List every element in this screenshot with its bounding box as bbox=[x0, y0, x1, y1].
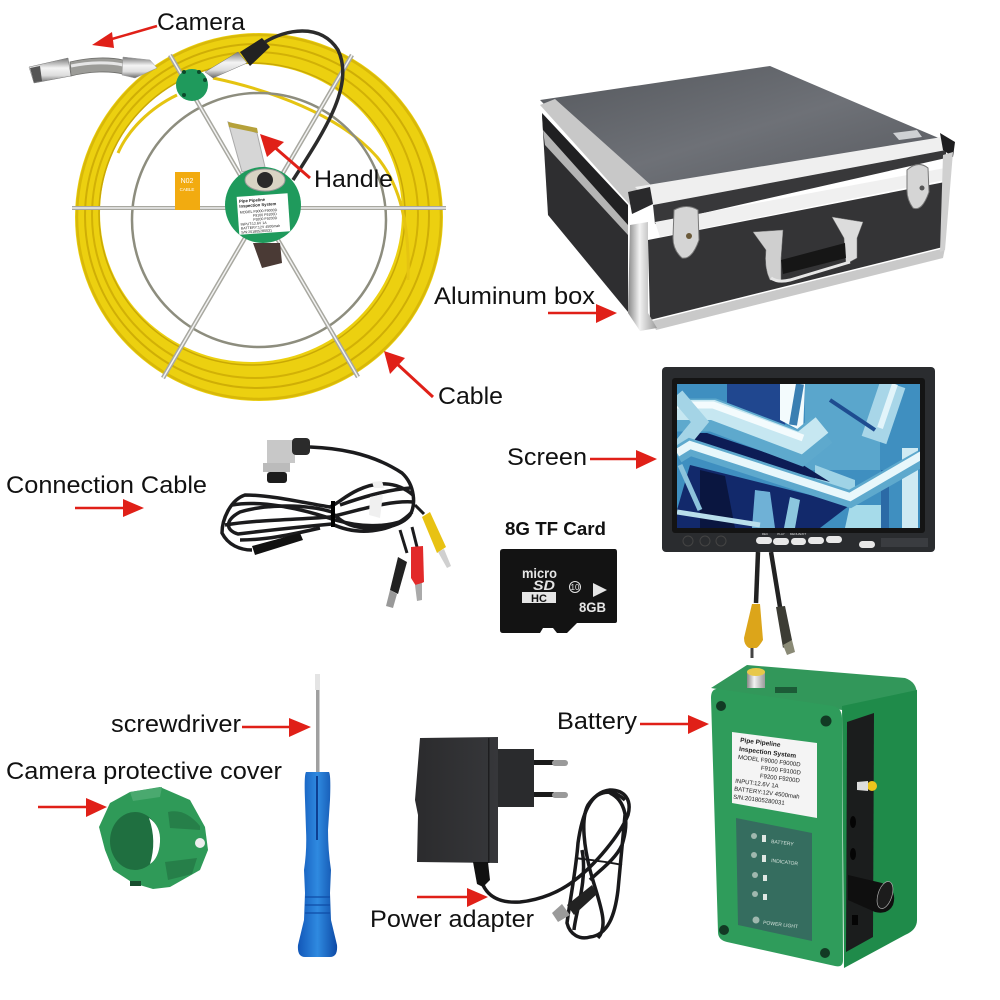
label: Connection Cable: Connection Cable bbox=[6, 472, 207, 499]
small green plate bbox=[176, 69, 208, 101]
8GB microSD card: 10 bbox=[571, 583, 580, 592]
pipe image bbox=[677, 384, 922, 528]
connector bbox=[263, 438, 310, 483]
lid left rail bbox=[540, 99, 652, 205]
label: Aluminum box: Aluminum box bbox=[434, 283, 595, 310]
length tag bbox=[175, 172, 200, 210]
8GB microSD card: HC bbox=[531, 593, 547, 605]
latch left bbox=[673, 206, 699, 258]
label: Battery: Battery bbox=[557, 708, 637, 735]
front face bbox=[711, 689, 843, 966]
hub with label: BATTERY:12V 4500mah bbox=[241, 224, 280, 231]
connection cable bbox=[222, 438, 451, 608]
label: 8G TF Card: 8G TF Card bbox=[505, 519, 606, 539]
bottom rail bbox=[652, 248, 945, 330]
front controls: MENU/EXIT bbox=[790, 532, 806, 536]
label: screwdriver: screwdriver bbox=[111, 711, 241, 738]
handle bbox=[228, 122, 282, 268]
label: Camera protective cover: Camera protective cover bbox=[6, 758, 282, 785]
length tag: CABLE bbox=[180, 187, 194, 192]
black side panel bbox=[846, 713, 896, 952]
camera protective cover bbox=[99, 787, 208, 889]
white tags bbox=[372, 481, 384, 488]
arrow: power adapter bbox=[417, 888, 488, 907]
aviation connector and black lead bbox=[205, 31, 343, 180]
8GB microSD card bbox=[500, 549, 617, 633]
arrow: protective cover bbox=[38, 798, 107, 817]
case handle bbox=[753, 217, 863, 281]
front controls: PLAY bbox=[777, 532, 785, 536]
label sticker bbox=[893, 130, 922, 140]
white product label: S/N:201805280031 bbox=[733, 795, 786, 807]
white product label bbox=[732, 732, 817, 818]
8GB microSD card: micro bbox=[522, 565, 557, 581]
arrow: connection cable bbox=[75, 499, 144, 517]
screwdriver bbox=[298, 674, 337, 957]
lid top bbox=[540, 66, 955, 195]
label: Camera: Camera bbox=[157, 9, 246, 36]
strain relief bbox=[473, 862, 490, 887]
yellow plug bbox=[422, 512, 446, 553]
latch right bbox=[907, 164, 929, 209]
white product label: F9200 F9200D bbox=[760, 774, 801, 785]
front panel bbox=[648, 182, 945, 320]
front controls bbox=[683, 532, 928, 548]
arrow: aluminum box bbox=[548, 304, 617, 323]
tie band bbox=[331, 501, 335, 527]
8GB microSD card: 8GB bbox=[579, 599, 606, 615]
monitor screen bbox=[662, 367, 935, 658]
coil bbox=[222, 447, 424, 553]
LED panel bbox=[736, 818, 812, 941]
arrow: camera bbox=[92, 26, 157, 48]
black plug bbox=[390, 557, 407, 594]
corner post bbox=[628, 222, 657, 331]
cable reel with camera bbox=[29, 31, 446, 401]
white product label: INPUT:12.6V 1A bbox=[735, 779, 779, 790]
label: Screen: Screen bbox=[507, 444, 587, 471]
arrow: screen bbox=[590, 450, 657, 469]
hub with label: INPUT:12.6V 1A bbox=[240, 221, 267, 227]
arrow: battery bbox=[640, 715, 709, 734]
white product label: Pipe Pipeline bbox=[740, 737, 781, 749]
right side bbox=[842, 690, 917, 968]
length tag: N02 bbox=[181, 178, 194, 185]
label: Handle: Handle bbox=[314, 166, 393, 193]
plug pins bbox=[534, 760, 568, 798]
corner cap bbox=[628, 187, 653, 214]
hub with label: MODEL F9000 F9000D bbox=[240, 208, 278, 215]
black strip bbox=[653, 150, 946, 224]
yellow coiled cable bbox=[75, 33, 443, 401]
monitor cables bbox=[744, 552, 795, 658]
arrow: cable bbox=[384, 351, 433, 397]
front controls: REC bbox=[762, 532, 769, 536]
RCA top port bbox=[747, 668, 797, 693]
white product label: BATTERY:12V 4500mah bbox=[734, 787, 800, 801]
battery box bbox=[711, 665, 917, 968]
cord bbox=[483, 790, 629, 938]
label: Power adapter: Power adapter bbox=[370, 906, 534, 933]
LED panel: BATTERY bbox=[771, 839, 795, 848]
screw holes bbox=[716, 701, 832, 958]
8GB microSD card: SD bbox=[533, 577, 555, 593]
hub with label: F9200 F9200D bbox=[253, 216, 278, 222]
aluminum box bbox=[540, 66, 955, 331]
red plug bbox=[411, 546, 424, 586]
arrow: screwdriver bbox=[242, 718, 311, 737]
hub with label: F9100 F9100D bbox=[253, 212, 277, 218]
DC plug bbox=[567, 885, 597, 915]
left side bbox=[542, 115, 628, 312]
LED panel: INDICATOR bbox=[771, 858, 799, 867]
label: Cable: Cable bbox=[438, 383, 503, 410]
right edge bbox=[940, 152, 953, 252]
camera head bbox=[29, 57, 157, 83]
steel frame bbox=[72, 55, 446, 378]
white product label: F9100 F9100D bbox=[761, 766, 802, 777]
hub with label bbox=[225, 167, 301, 243]
hub with label: S/N:201805280031 bbox=[241, 228, 272, 235]
power adapter bbox=[415, 737, 629, 938]
silver strip bbox=[655, 168, 945, 237]
white product label: Inspection System bbox=[739, 746, 797, 760]
lid front rail bbox=[635, 137, 946, 205]
strain relief bbox=[252, 533, 303, 555]
hub with label: Inspection System bbox=[239, 201, 277, 209]
arrow: handle bbox=[260, 134, 310, 178]
white product label: MODEL F9000 F9000D bbox=[738, 755, 801, 769]
hub with label: Pipe Pipeline bbox=[239, 197, 266, 204]
top face bbox=[711, 665, 917, 710]
LED panel: POWER LIGHT bbox=[763, 920, 798, 930]
